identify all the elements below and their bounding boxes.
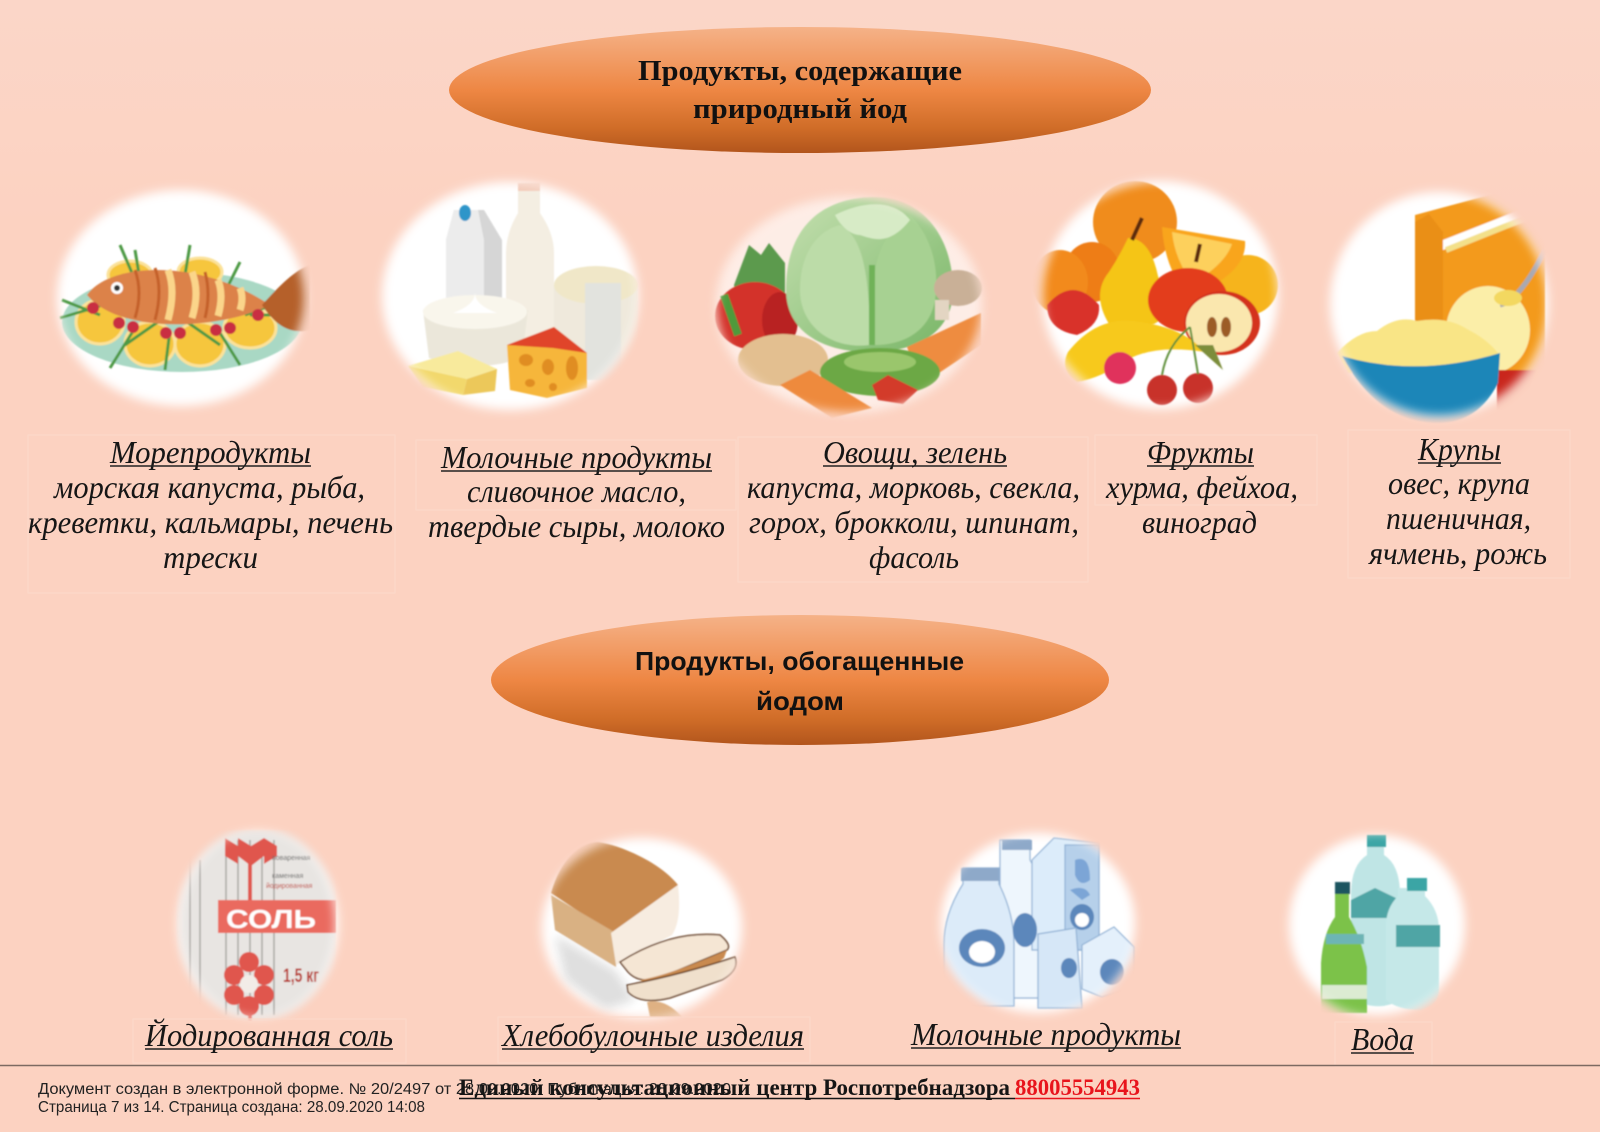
heading: iodine-fortified products: [491, 615, 1109, 745]
icon: water bottles: [1289, 835, 1465, 1015]
icon: salt package: поваренная: [272, 855, 311, 862]
text: seafood: Морепродукты: [109, 434, 311, 470]
heading: natural iodine products: [449, 27, 1151, 153]
icon: fish on a plate: [57, 190, 310, 406]
panel: bakery products: [498, 838, 810, 1063]
text: fruits: Фрукты: [1147, 434, 1254, 470]
icon: salt package: [176, 830, 338, 1020]
icon: salt package: йодированная: [266, 882, 313, 890]
text: dairy products: твердые сыры, молоко: [428, 508, 725, 544]
text: dairy products: Молочные продукты: [440, 439, 712, 475]
heading: natural iodine products: природный йод: [693, 93, 907, 125]
icon: cabbage and vegetables: [715, 197, 982, 418]
document footer text: Документ создан в электронной форме. № 20/2497 от 28.09.2020. Публикация: 28.09.2020: [38, 1081, 731, 1098]
icon: fruit pile: [1032, 181, 1278, 409]
panel: iodized salt: [133, 830, 406, 1063]
text: vegetables and greens: капуста, морковь, свекла,: [747, 469, 1080, 505]
text: cereals: овес, крупа: [1388, 465, 1530, 501]
document footer text: [38, 1081, 731, 1116]
text: fruits: виноград: [1142, 504, 1257, 540]
consultation centre line with phone number: 88005554943: [1015, 1075, 1140, 1100]
text: dairy products: [416, 439, 736, 544]
icon: loaf of bread with slices: [542, 838, 742, 1018]
text: fruits: [1095, 434, 1317, 540]
text: vegetables and greens: фасоль: [869, 539, 959, 575]
panel: vegetables and greens: [715, 197, 1088, 582]
panel: cereals: [1330, 180, 1570, 578]
icon: salt package: СОЛЬ: [226, 904, 316, 934]
consultation centre line with phone number: Единый консультационный центр Роспотребнадзора: [459, 1075, 1010, 1100]
panel: fruits: [1032, 181, 1317, 540]
text: seafood: [28, 434, 395, 593]
icon: milk bottles and cartons: [941, 833, 1135, 1013]
text: iodized salt: Йодированная соль: [144, 1017, 393, 1053]
document footer text: Страница 7 из 14. Страница создана: 28.09.2020 14:08: [38, 1099, 425, 1116]
text: cereals: ячмень, рожь: [1368, 535, 1547, 571]
text: fortified dairy products: Молочные продукты: [910, 1016, 1181, 1052]
heading: natural iodine products: Продукты, содержащие: [638, 55, 962, 87]
heading: iodine-fortified products: йодом: [756, 686, 844, 716]
icon: salt package: каменная: [272, 873, 303, 880]
text: vegetables and greens: Овощи, зелень: [823, 434, 1007, 470]
text: vegetables and greens: горох, брокколи, шпинат,: [749, 504, 1079, 540]
text: water: Вода: [1351, 1021, 1414, 1057]
text: water: [1335, 1021, 1432, 1066]
icon: milk, cream and cheese: [382, 182, 638, 410]
text: cereals: Крупы: [1417, 431, 1501, 467]
text: dairy products: сливочное масло,: [467, 473, 686, 509]
text: fruits: хурма, фейхоа,: [1105, 469, 1298, 505]
panel: fortified dairy products: [910, 833, 1181, 1052]
panel: dairy products: [382, 182, 736, 544]
text: seafood: морская капуста, рыба,: [53, 469, 365, 505]
text: bakery products: Хлебобулочные изделия: [500, 1017, 804, 1053]
text: seafood: трески: [163, 539, 258, 575]
text: cereals: [1348, 430, 1570, 578]
text: vegetables and greens: [738, 434, 1088, 582]
icon: salt package: 1,5 кг: [283, 966, 319, 987]
panel: seafood: [28, 190, 395, 593]
icon: porridge and cereal box: [1330, 180, 1548, 423]
text: cereals: пшеничная,: [1386, 500, 1531, 536]
text: seafood: креветки, кальмары, печень: [28, 504, 393, 540]
heading: iodine-fortified products: Продукты, обогащенные: [635, 646, 964, 676]
footer rule: [0, 1064, 1600, 1066]
panel: water: [1289, 835, 1465, 1066]
